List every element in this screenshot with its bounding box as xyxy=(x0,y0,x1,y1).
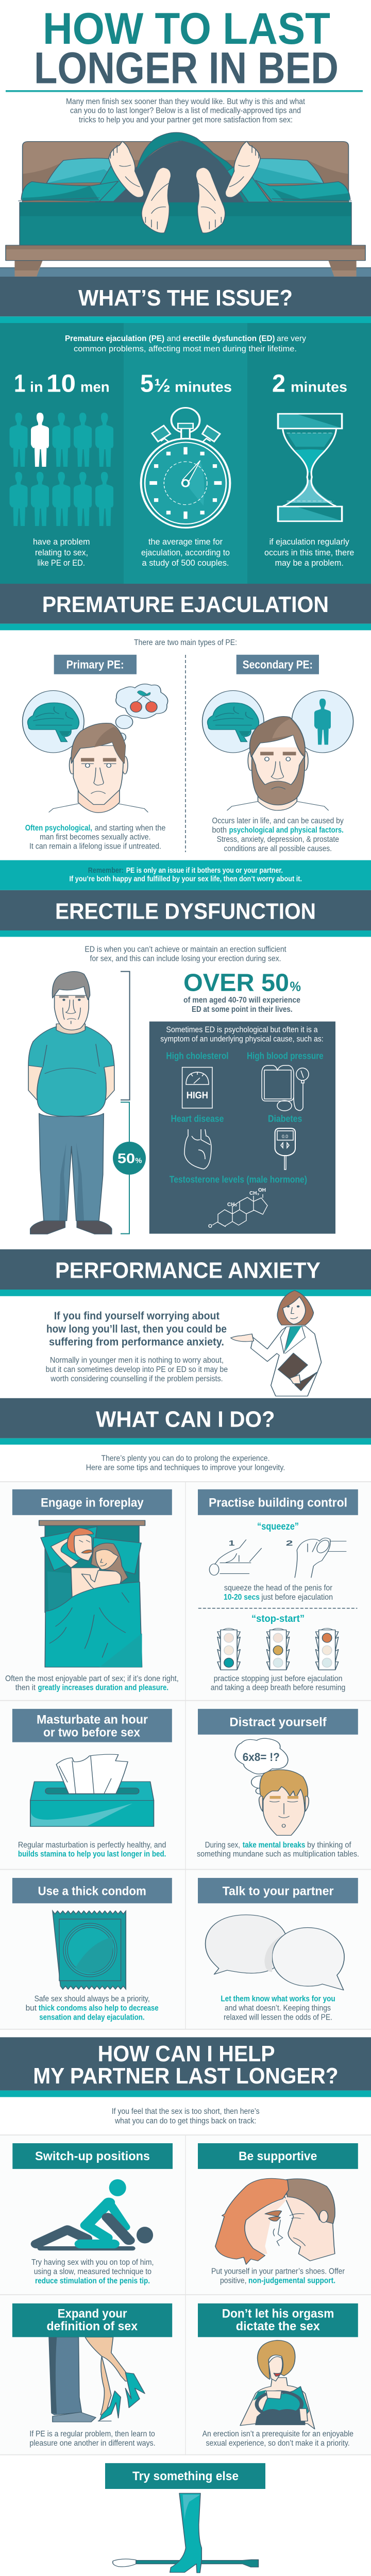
stat: over 50 percent: ED at some point in their lives. xyxy=(192,1005,293,1014)
intro text xyxy=(85,945,286,963)
intro text: can you do to last longer? Below is a list of medically-approved tips and xyxy=(70,107,301,115)
tip text: and what doesn’t. Keeping things xyxy=(225,2004,331,2013)
stat: 5 1/2 minutes xyxy=(140,370,232,398)
cause: high cholesterol xyxy=(166,1050,229,1108)
intro text: Many men finish sex sooner than they would like. But why is this and what xyxy=(66,97,306,106)
tip heading: dictate the sex xyxy=(236,2319,320,2333)
tip text: take mental breaks xyxy=(243,1841,305,1850)
text: primary PE xyxy=(25,824,165,851)
bracket: height bottom half: 50 xyxy=(117,1151,135,1166)
text block xyxy=(46,1310,228,1383)
tip text: relaxed will lessen the odds of PE. xyxy=(224,2013,332,2022)
panel: premature ejaculation xyxy=(0,584,371,890)
illustration: boot and whip xyxy=(113,2493,258,2573)
intro text: If you feel that the sex is too short, then here’s xyxy=(112,2107,260,2116)
intro text: tricks to help you and your partner get more satisfaction from sex: xyxy=(79,115,293,125)
tip heading: Switch-up positions xyxy=(35,2149,150,2163)
cause: high blood pressure xyxy=(247,1050,324,1111)
tip text: builds stamina to help you last longer in bed. xyxy=(18,1850,166,1859)
stop-start text: and taking a deep breath before resuming xyxy=(211,1684,345,1692)
tip text xyxy=(26,1995,159,2022)
stat: over 50 percent xyxy=(183,969,301,1014)
cause: heart disease: Heart disease xyxy=(171,1114,224,1124)
illustration: couple in bed xyxy=(39,1520,145,1667)
illustration: primary PE man xyxy=(23,684,168,812)
tip heading xyxy=(105,2463,265,2489)
label: secondary PE: Secondary PE: xyxy=(243,658,313,671)
tip heading: Use a thick condom xyxy=(38,1885,146,1898)
stat text: if ejaculation: may be a problem. xyxy=(275,558,344,568)
stat text: the average time xyxy=(141,537,230,568)
tip heading: Be supportive xyxy=(239,2149,317,2163)
tip: expand your definition xyxy=(12,2303,172,2448)
tip heading: Try something else xyxy=(132,2469,239,2483)
cause: testosterone: OH xyxy=(258,1188,266,1193)
illustration: secondary PE man xyxy=(203,690,353,810)
tip text: Let them know what works for you xyxy=(221,1995,335,2004)
intro text: There are two main types of PE: xyxy=(134,638,237,647)
tip text: If PE is a regular problem, then learn to xyxy=(29,2430,155,2438)
intro text xyxy=(112,2107,260,2125)
squeeze text xyxy=(224,1584,333,1602)
cause: testosterone: Testosterone levels (male hormone) xyxy=(170,1175,307,1185)
title: HOW TO LAST xyxy=(43,4,330,54)
tip text: During sex, xyxy=(205,1841,240,1850)
illustration: legs xyxy=(49,2337,145,2422)
intro text xyxy=(86,1454,285,1472)
icon: ten men xyxy=(9,413,113,526)
stat text: if ejaculation: occurs in this time, there xyxy=(264,548,354,557)
tip heading xyxy=(198,1709,358,1735)
stat: 5 1/2 minutes: ½ xyxy=(154,375,171,396)
stat text: the average time: a study of 500 couples. xyxy=(142,558,229,568)
text block: worth considering counselling if the problem persists. xyxy=(50,1375,223,1383)
tip heading xyxy=(198,2303,358,2337)
tip heading: Expand your xyxy=(58,2307,127,2320)
heading: PREMATURE EJACULATION xyxy=(42,592,329,617)
tip text: using a slow, measured technique to xyxy=(34,2267,151,2276)
tip text: pleasure one another in different ways. xyxy=(29,2439,156,2448)
tip heading xyxy=(12,2143,173,2169)
text: secondary PE: both xyxy=(212,826,227,835)
cause: testosterone: CH₃ xyxy=(227,1202,237,1208)
cause: testosterone: CH₃ xyxy=(249,1191,259,1196)
text block: Normally in younger men it is nothing to worry about, xyxy=(50,1356,224,1365)
cause: heart disease xyxy=(171,1114,224,1169)
callout: remember: Remember: xyxy=(88,866,124,875)
text: primary PE: Often psychological, xyxy=(25,824,92,833)
tip text: thick condoms also help to decrease xyxy=(39,2004,159,2013)
stat: over 50 percent: of men aged 40-70 will experience xyxy=(183,996,300,1005)
bracket: height top half xyxy=(121,972,130,1100)
stat text: have a problem: like PE or ED. xyxy=(37,558,85,568)
text: secondary PE: Stress, anxiety, depression, & prostate xyxy=(217,835,339,844)
text block: If you find yourself worrying about xyxy=(54,1310,220,1322)
tip heading xyxy=(12,2303,172,2337)
stat text: if ejaculation: if ejaculation regularly xyxy=(269,537,349,547)
tip text xyxy=(197,1841,359,1859)
stop-start text xyxy=(211,1674,345,1692)
icon: hourglass xyxy=(278,414,342,521)
squeeze text: 10-20 secs xyxy=(224,1593,260,1602)
tip: distract yourself xyxy=(197,1709,359,1859)
icon: squeeze hands: 2 xyxy=(286,1538,293,1547)
text block: are very xyxy=(277,334,306,343)
stat text: if ejaculation xyxy=(264,537,354,568)
cause: diabetes: 0.0 xyxy=(282,1134,288,1139)
tip text: Often the most enjoyable part of sex; if it’s done right, xyxy=(5,1674,179,1683)
illustration: couple faces xyxy=(215,2178,335,2264)
stat: 1 in 10 men: men xyxy=(80,379,110,395)
heading: WHAT’S THE ISSUE? xyxy=(78,285,293,311)
stat: 2 minutes xyxy=(272,370,347,398)
tip heading xyxy=(12,1489,172,1515)
text: secondary PE: conditions are all possible causes. xyxy=(224,844,332,853)
text block: common problems, affecting most men during their lifetime. xyxy=(74,345,297,353)
tip: switch-up positions xyxy=(12,2143,173,2285)
heading xyxy=(33,2041,339,2089)
heading: HOW CAN I HELP xyxy=(98,2041,275,2066)
tip: be supportive xyxy=(198,2143,358,2285)
tip heading xyxy=(198,1878,358,1903)
cause: testosterone: O xyxy=(208,1224,212,1229)
intro text: ED is when you can’t achieve or maintain an erection sufficient xyxy=(85,945,286,954)
tip text: Safe sex should always be a priority, xyxy=(35,1995,150,2004)
tip heading xyxy=(12,1709,172,1742)
tip heading: Engage in foreplay xyxy=(41,1496,144,1510)
tip text xyxy=(221,1995,335,2022)
squeeze label: “squeeze” xyxy=(257,1521,299,1532)
icon: speech bubbles xyxy=(206,1915,344,1990)
panel: erectile dysfunction xyxy=(0,890,371,1234)
tip text: sensation and delay ejaculation. xyxy=(39,2013,145,2022)
tip text: then it xyxy=(15,1684,36,1692)
panel: how can i help xyxy=(0,2037,371,2576)
heading: PERFORMANCE ANXIETY xyxy=(55,1258,321,1283)
tip text xyxy=(29,2430,156,2448)
panel: what's the issue xyxy=(0,277,371,584)
tip: engage in foreplay xyxy=(5,1489,179,1692)
tip text xyxy=(5,1674,179,1692)
icon: couple figures xyxy=(37,2179,153,2248)
tip text xyxy=(203,2430,353,2448)
label: primary PE: Primary PE: xyxy=(66,658,124,671)
text: primary PE: It can remain a lifelong issue if untreated. xyxy=(29,842,161,851)
text block xyxy=(65,334,306,353)
text: secondary PE: Occurs later in life, and can be caused by xyxy=(212,817,344,825)
icon: stopwatch xyxy=(141,408,230,528)
tip text: reduce stimulation of the penis tip. xyxy=(35,2277,150,2285)
stat: 1 in 10 men: in xyxy=(30,379,43,395)
tip heading: Don’t let his orgasm xyxy=(222,2307,334,2320)
stat text: the average time: the average time for xyxy=(148,537,223,547)
squeeze text: just before ejaculation xyxy=(261,1593,333,1602)
tip heading xyxy=(198,2143,358,2169)
text block: suffering from performance anxiety. xyxy=(49,1336,224,1348)
text: primary PE: and starting when the xyxy=(95,824,165,833)
cause: testosterone xyxy=(170,1175,307,1229)
tip: try something else xyxy=(93,2463,278,2576)
text: primary PE: man first becomes sexually active. xyxy=(40,833,150,842)
stop-start text: practice stopping just before ejaculation xyxy=(214,1674,342,1683)
text: secondary PE: psychological and physical factors. xyxy=(229,826,344,835)
panel: performance anxiety xyxy=(0,1249,371,1396)
stop-start label: “stop-start” xyxy=(251,1614,305,1624)
bed illustration xyxy=(0,132,371,277)
tip text: An erection isn’t a prerequisite for an enjoyable xyxy=(203,2430,353,2438)
tip heading: Talk to your partner xyxy=(223,1885,334,1898)
callout: remember xyxy=(0,860,371,890)
stat text: have a problem xyxy=(33,537,90,568)
icon: squeeze hands: 1 xyxy=(229,1538,235,1547)
tip: masturbate xyxy=(12,1709,172,1859)
stat: 5 1/2 minutes: 5 xyxy=(140,370,154,398)
callout: remember: If you’re both happy and fulfilled by your sex life, then don’t worry about it. xyxy=(69,875,302,884)
tip text: greatly increases duration and pleasure. xyxy=(38,1684,168,1692)
tip heading: or two before sex xyxy=(43,1726,141,1740)
heading: ERECTILE DYSFUNCTION xyxy=(55,899,316,924)
tip heading: Masturbate an hour xyxy=(37,1713,148,1726)
label: secondary PE xyxy=(237,655,319,674)
icon: tissue box xyxy=(30,1754,154,1826)
tip: thick condom xyxy=(12,1878,172,2022)
text: secondary PE xyxy=(212,817,344,853)
intro text: for sex, and this can include losing your erection during sex. xyxy=(90,955,281,963)
intro text: Here are some tips and techniques to improve your longevity. xyxy=(86,1464,285,1472)
panel: physical causes xyxy=(149,1022,335,1234)
tip text: non-judgemental support. xyxy=(248,2276,335,2285)
text block xyxy=(160,1026,324,1044)
squeeze text: squeeze the head of the penis for xyxy=(224,1584,332,1592)
label: primary PE xyxy=(54,655,137,674)
stat: 5 1/2 minutes: minutes xyxy=(175,379,232,395)
illustration: older man xyxy=(28,972,114,1234)
tip text xyxy=(211,2267,345,2285)
text block: how long you’ll last, then you could be xyxy=(46,1323,227,1335)
illustration: doctor xyxy=(231,1291,322,1396)
tip heading: definition of sex xyxy=(46,2319,138,2333)
intro text: what you can do to get things back on track: xyxy=(114,2116,256,2125)
text block: and xyxy=(167,334,180,343)
illustration: thinking man xyxy=(235,1738,309,1835)
stat text: have a problem: have a problem xyxy=(33,537,90,547)
tip heading xyxy=(12,1878,172,1903)
panel: intro xyxy=(0,4,371,277)
stat: 1 in 10 men: 10 xyxy=(46,370,76,398)
tip text: something mundane such as multiplication tables. xyxy=(197,1850,359,1859)
tip: practise building control xyxy=(198,1489,358,1692)
tip: talk to your partner xyxy=(198,1878,358,2022)
tip: don't let his orgasm xyxy=(198,2303,358,2448)
cause: diabetes xyxy=(268,1114,302,1170)
stat: 2 minutes: minutes xyxy=(291,379,347,395)
text block: but it can sometimes develop into PE or ED so it may be xyxy=(46,1365,228,1374)
tip text xyxy=(18,1841,166,1859)
intro text xyxy=(66,97,306,125)
tip heading: Practise building control xyxy=(209,1496,347,1510)
bracket: height bottom half xyxy=(113,1102,146,1234)
text block: symptom of an underlying physical cause, such as: xyxy=(160,1035,324,1044)
stat: over 50 percent: OVER 50 xyxy=(183,969,289,996)
stat text: have a problem: relating to sex, xyxy=(35,548,88,557)
bracket: height bottom half: % xyxy=(135,1156,142,1165)
thought text: 6x8= !? xyxy=(243,1751,280,1764)
callout: remember: PE is only an issue if it bothers you or your partner. xyxy=(126,866,283,875)
text block: erectile dysfunction (ED) xyxy=(182,334,275,343)
tip heading: Distract yourself xyxy=(229,1716,327,1730)
stat: 1 in 10 men: 1 xyxy=(14,370,26,398)
tip text: sexual experience, so don’t make it a priority. xyxy=(206,2439,350,2448)
tip heading xyxy=(198,1489,358,1515)
cause: high cholesterol: High cholesterol xyxy=(166,1050,229,1061)
title xyxy=(34,4,339,93)
tip text: but xyxy=(26,2004,37,2013)
tip text: Regular masturbation is perfectly healthy, and xyxy=(18,1841,166,1850)
heading: WHAT CAN I DO? xyxy=(96,1406,275,1432)
cause: high cholesterol: HIGH xyxy=(187,1090,208,1100)
text block: Sometimes ED is psychological but often it is a xyxy=(166,1026,318,1035)
tip text: Put yourself in your partner’s shoes. Offer xyxy=(211,2267,345,2276)
icon: squeeze hands xyxy=(209,1538,346,1578)
tip text: by thinking of xyxy=(307,1841,351,1850)
icon: traffic lights xyxy=(217,1629,339,1670)
stat: 1 in 10 men xyxy=(14,370,110,398)
tip text: positive, xyxy=(220,2276,246,2285)
cause: diabetes: Diabetes xyxy=(268,1114,302,1124)
stat text: the average time: ejaculation, according to xyxy=(141,548,230,557)
stat: over 50 percent: % xyxy=(290,979,301,994)
text block: Premature ejaculation (PE) xyxy=(65,334,164,343)
icon: condom wrapper xyxy=(53,1911,126,1989)
tip text xyxy=(31,2258,154,2285)
tip text: Try having sex with you on top of him, xyxy=(31,2258,154,2267)
heading: MY PARTNER LAST LONGER? xyxy=(33,2063,339,2089)
cause: high blood pressure: High blood pressure xyxy=(247,1050,324,1061)
stat: 2 minutes: 2 xyxy=(272,370,285,398)
illustration: woman driving xyxy=(240,2341,315,2429)
intro text: There’s plenty you can do to prolong the experience. xyxy=(101,1454,270,1463)
panel: what can i do xyxy=(0,1398,371,2030)
